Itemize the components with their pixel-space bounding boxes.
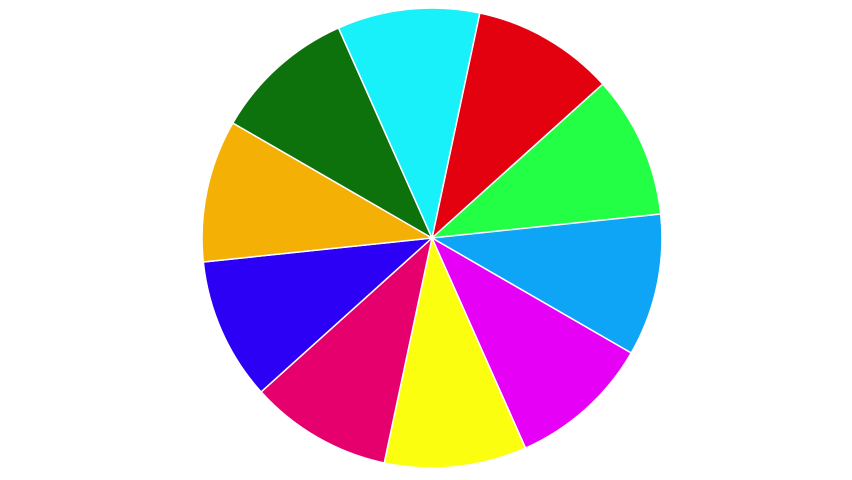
slice: green xyxy=(432,84,661,238)
slice: cyan xyxy=(338,8,480,238)
slice: orange xyxy=(202,123,432,262)
slice: magenta xyxy=(432,238,631,448)
slice: sky blue xyxy=(432,214,662,353)
slice: blue violet xyxy=(203,238,432,392)
slice: yellow xyxy=(384,238,526,468)
slice: dark green xyxy=(233,28,432,238)
slice: red xyxy=(432,13,603,238)
slice: crimson xyxy=(261,238,432,463)
